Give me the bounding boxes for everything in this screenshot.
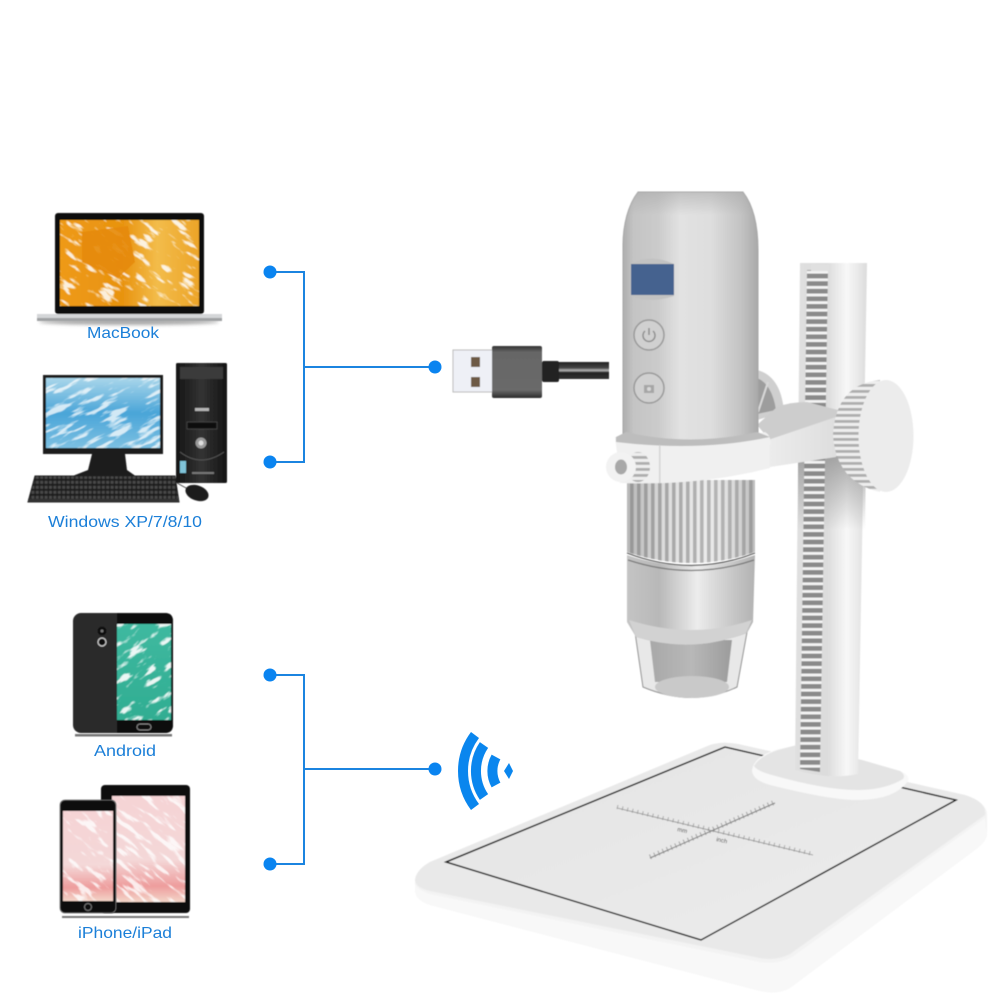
camera button [634,373,664,403]
collar clamp [615,432,770,483]
rear bracket [757,370,784,420]
icon: MacBook laptop [36,212,222,327]
OLED display [630,258,674,300]
knurled focus ring [627,480,755,563]
lower sleeve [627,553,755,645]
icon: wifi signal [463,735,513,807]
focus knob [833,380,914,492]
icon: iPad tablet [61,784,191,919]
tower [176,363,227,483]
lens cover [635,632,747,698]
icon: iPhone [58,799,118,914]
column [795,263,867,776]
illustration: digital microscope on stand [415,192,987,992]
scale label: inch: inch [716,837,728,845]
column foot [752,745,908,800]
connector: wireless group [264,668,442,870]
icon: desktop computer [26,362,228,504]
icon: Android phone [72,612,174,738]
shadow below arm [798,456,866,530]
microscope body [623,192,758,442]
group: mobile devices [58,612,191,938]
mouse [177,482,211,504]
stage plate [446,747,956,940]
measuring cross scale [617,802,813,858]
label: Windows XP/7/8/10: Windows XP/7/8/10 [48,514,202,531]
monitor [42,374,164,476]
icon: USB cable [453,346,609,398]
label: iPhone/iPad: iPhone/iPad [78,925,172,942]
group: computer devices [26,212,228,527]
label: Android: Android [94,743,156,760]
rack teeth [800,270,828,772]
connector: USB group [264,266,442,468]
power button [634,320,664,350]
arm [757,402,838,467]
keyboard [28,476,179,502]
label: MacBook: MacBook [87,325,160,342]
collar screw [606,452,650,482]
scale label: mm: mm [677,827,688,835]
stand base [415,743,987,992]
